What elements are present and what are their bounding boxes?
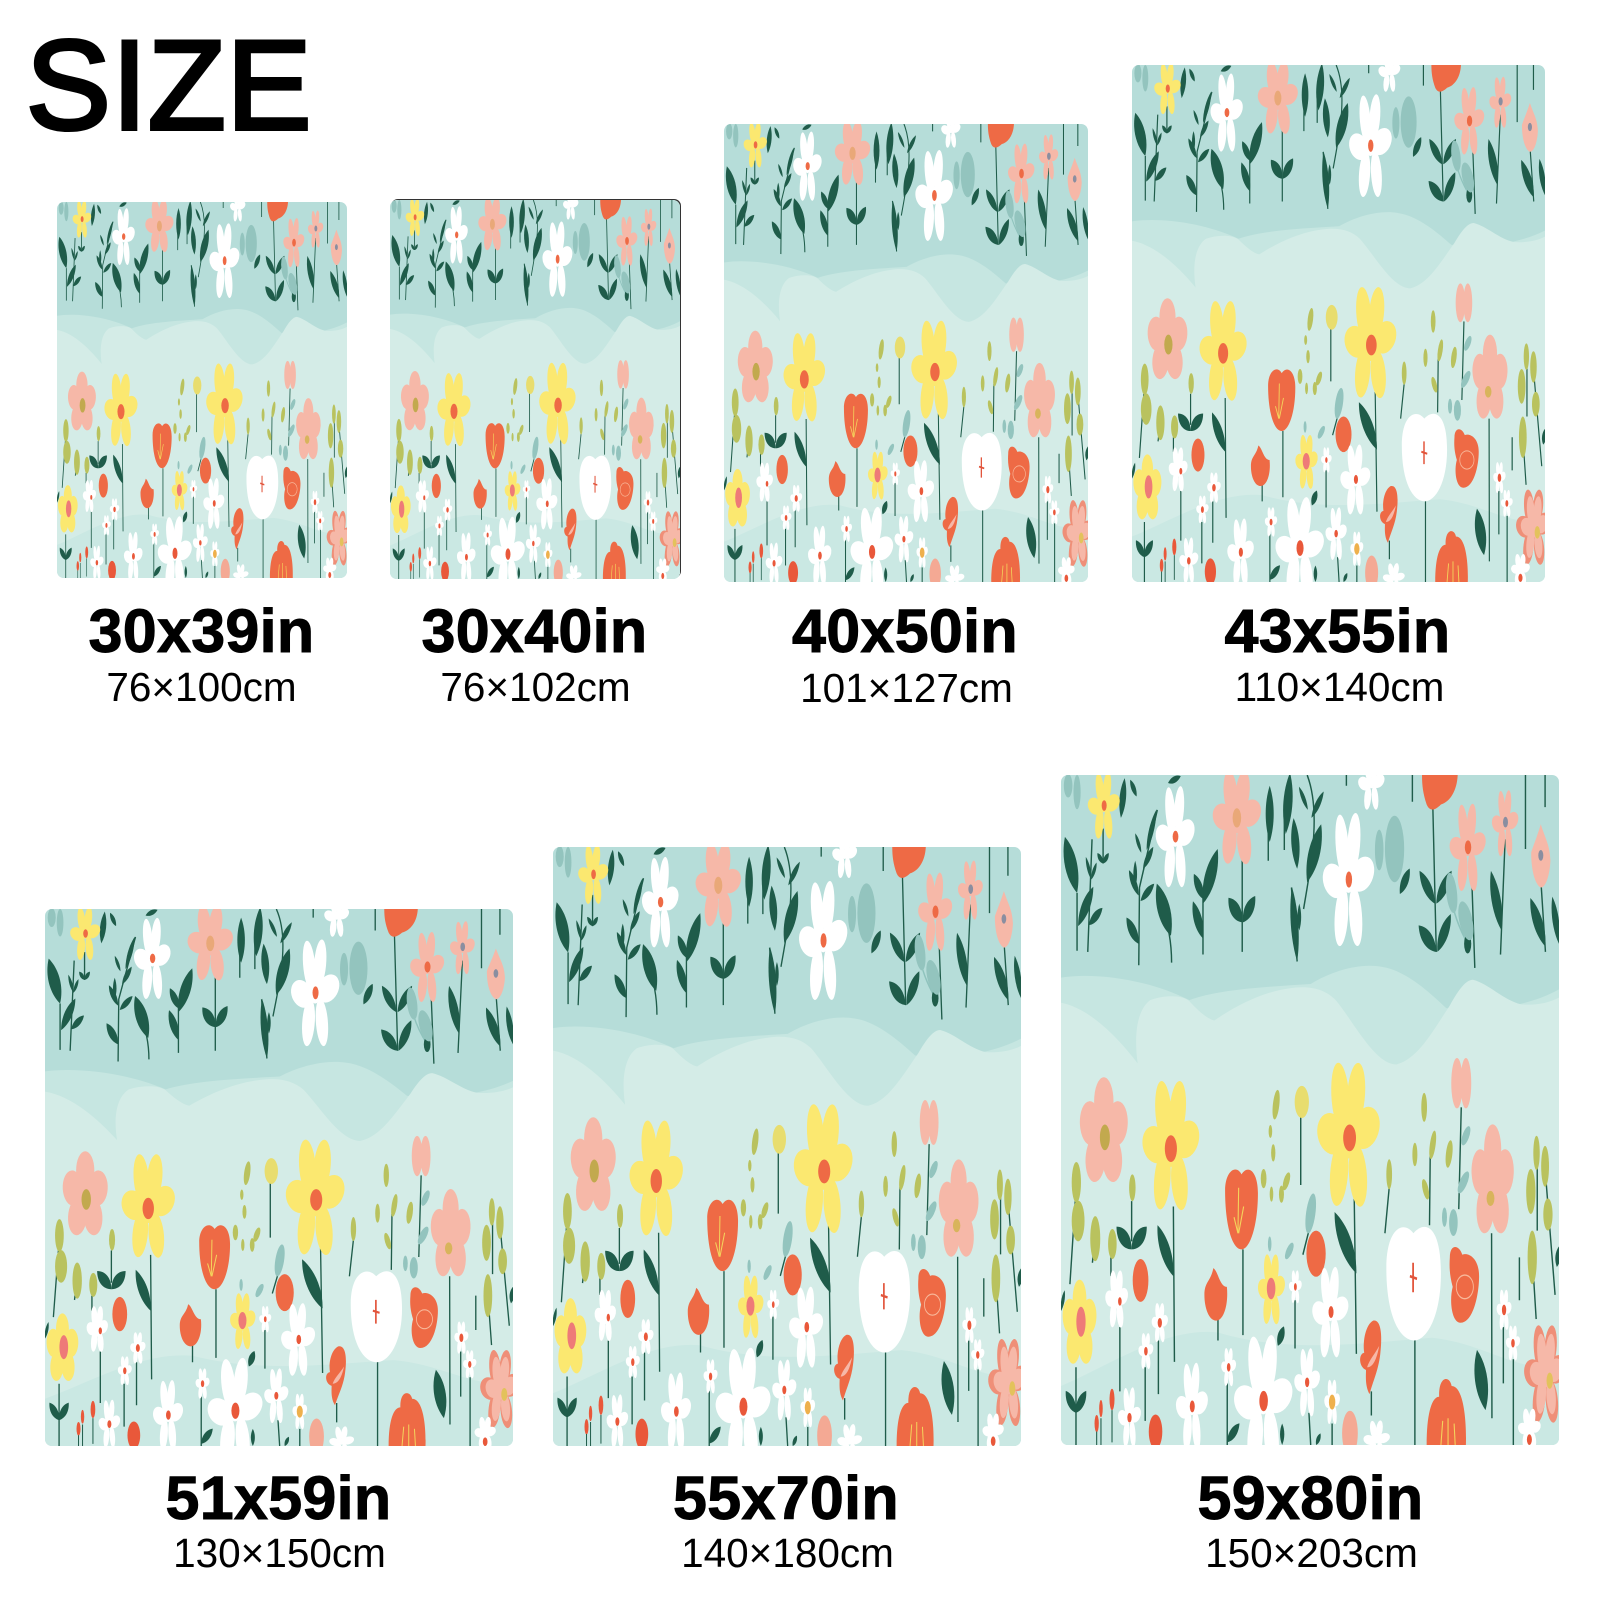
panel: 30x39in blanket (57, 202, 1526, 710)
size in inches: 30x40in (422, 597, 647, 665)
size in centimetres: 150×203cm (1205, 1530, 1418, 1576)
blanket image (553, 847, 1021, 1446)
size in centimetres: 110×140cm (1235, 664, 1444, 710)
panel: 59x80in blanket (1061, 775, 1559, 1576)
size in inches: 51x59in (166, 1464, 391, 1532)
panel: 40x50in blanket (724, 124, 1088, 711)
blanket image (724, 124, 1088, 582)
panel: 55x70in blanket (553, 847, 1021, 1576)
panel: 43x55in blanket (1132, 65, 1545, 710)
blanket image (390, 200, 680, 579)
panel: 51x59in blanket (45, 909, 513, 1576)
size in centimetres: 76×100cm (106, 664, 297, 710)
size in inches: 55x70in (673, 1464, 899, 1532)
size in centimetres: 76×102cm (440, 664, 631, 710)
blanket image (57, 202, 347, 578)
blanket image (1132, 65, 1545, 582)
blanket image (1061, 775, 1559, 1445)
panel: 30x40in blanket (390, 199, 1532, 710)
size in inches: 30x39in (89, 597, 314, 665)
size in inches: 59x80in (1198, 1464, 1423, 1532)
size in inches: 40x50in (792, 597, 1018, 665)
size in centimetres: 101×127cm (800, 665, 1013, 711)
blanket image (45, 909, 513, 1446)
title: SIZE (26, 14, 312, 156)
size in centimetres: 140×180cm (681, 1530, 894, 1576)
size in centimetres: 130×150cm (173, 1530, 386, 1576)
size in inches: 43x55in (1225, 597, 1450, 665)
